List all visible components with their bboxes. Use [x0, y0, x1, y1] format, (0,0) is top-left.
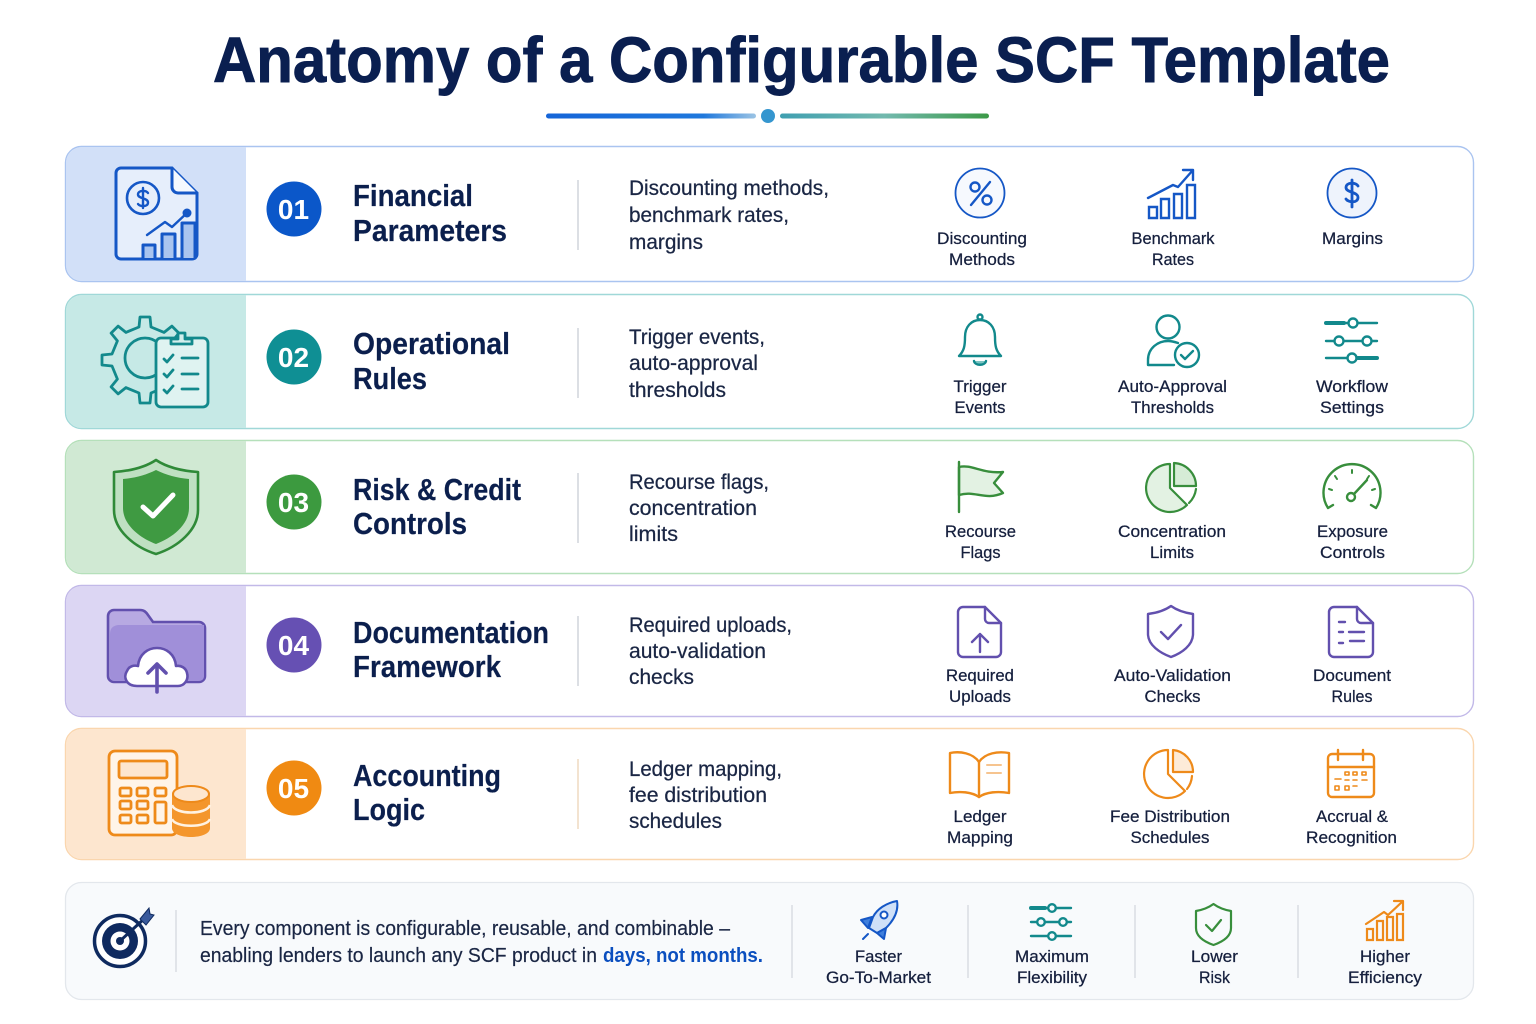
number badge 05	[266, 760, 322, 816]
item: concentration limits: Limits	[1150, 543, 1194, 562]
item: concentration limits	[1118, 463, 1226, 562]
item: auto-approval thresholds	[1118, 316, 1227, 417]
description	[629, 758, 782, 833]
panel: 05 accounting logic	[66, 728, 1474, 860]
description	[629, 177, 829, 254]
item: discounting methods: Methods	[949, 250, 1015, 269]
heading: financial parameters: Parameters	[353, 213, 507, 248]
description: Required uploads,	[629, 614, 792, 637]
item: accrual and recognition: Accrual &	[1316, 807, 1389, 826]
benefit: lower risk: Risk	[1199, 968, 1230, 987]
item: fee distribution schedules: Schedules	[1130, 828, 1210, 847]
item: accrual and recognition: Recognition	[1306, 828, 1397, 847]
item: discounting methods	[937, 168, 1027, 269]
heading: documentation framework: Documentation	[353, 615, 549, 650]
item: recourse flags: Flags	[960, 543, 1000, 562]
number badge 04: 04	[278, 630, 309, 661]
description: concentration	[629, 497, 757, 520]
number badge 01: 01	[278, 194, 309, 225]
description: checks	[629, 666, 694, 689]
heading: operational rules	[353, 326, 510, 396]
summary statement: enabling lenders to launch any SCF product in	[200, 944, 597, 967]
summary statement: days, not months.	[603, 944, 763, 967]
benefit: faster go-to-market	[826, 901, 931, 987]
benefit: higher efficiency: Higher	[1360, 947, 1410, 966]
heading: financial parameters: Financial	[353, 178, 473, 213]
description: benchmark rates,	[629, 204, 789, 227]
item: exposure controls	[1317, 464, 1388, 562]
item: document rules	[1313, 607, 1391, 706]
item: accrual and recognition	[1306, 750, 1397, 847]
heading: accounting logic	[353, 758, 501, 827]
description: limits	[629, 523, 678, 546]
benefit: maximum flexibility: Maximum	[1015, 947, 1089, 966]
description: schedules	[629, 810, 722, 833]
item: workflow settings: Workflow	[1316, 377, 1389, 396]
description: auto-approval	[629, 352, 758, 375]
title: Anatomy of a Configurable SCF Template	[213, 24, 1390, 96]
item: workflow settings: Settings	[1320, 398, 1384, 417]
item: workflow settings	[1316, 318, 1389, 417]
description: thresholds	[629, 379, 726, 402]
number badge 02	[266, 330, 322, 384]
benefit: faster go-to-market: Go-To-Market	[826, 968, 931, 987]
item: fee distribution schedules	[1110, 750, 1230, 847]
item: exposure controls: Controls	[1320, 543, 1385, 562]
benefit: maximum flexibility	[1015, 904, 1089, 987]
item: benchmark rates	[1132, 170, 1215, 269]
benefit: higher efficiency	[1348, 901, 1422, 987]
item: auto-approval thresholds: Auto-Approval	[1118, 377, 1227, 396]
item: auto-approval thresholds: Thresholds	[1131, 398, 1214, 417]
heading: risk and credit controls	[353, 472, 521, 541]
panel: 04 documentation framework	[66, 586, 1474, 716]
description	[629, 326, 765, 402]
heading: documentation framework: Framework	[353, 649, 502, 684]
icon: calculator and coins	[109, 751, 210, 837]
item: required uploads: Uploads	[949, 687, 1011, 706]
item: margins	[1322, 168, 1383, 248]
icon: folder with cloud upload	[108, 610, 205, 692]
benefit: lower risk: Lower	[1191, 947, 1238, 966]
item: ledger mapping: Mapping	[947, 828, 1013, 847]
description: auto-validation	[629, 640, 766, 663]
item: recourse flags	[945, 462, 1016, 562]
heading: risk and credit controls: Risk & Credit	[353, 472, 521, 507]
number badge 01	[266, 182, 322, 236]
benefit: maximum flexibility: Flexibility	[1017, 968, 1087, 987]
icon: shield with check	[114, 460, 198, 554]
item: concentration limits: Concentration	[1118, 522, 1226, 541]
item: recourse flags: Recourse	[945, 522, 1016, 541]
number badge 02: 02	[278, 342, 309, 373]
item: document rules: Rules	[1332, 687, 1372, 706]
heading: accounting logic: Accounting	[353, 758, 501, 793]
description	[629, 471, 769, 546]
item: trigger events: Trigger	[954, 377, 1007, 396]
title underline	[546, 109, 989, 123]
number badge 03	[266, 474, 322, 530]
item: ledger mapping	[947, 752, 1013, 847]
heading: operational rules: Operational	[353, 326, 510, 361]
panel: 01 financial parameters	[66, 146, 1474, 282]
item: benchmark rates: Benchmark	[1132, 229, 1215, 248]
summary statement: Every component is configurable, reusable, and combinable –	[200, 917, 731, 940]
number badge 05: 05	[278, 773, 309, 804]
item: auto-validation checks: Checks	[1144, 687, 1200, 706]
description: Ledger mapping,	[629, 758, 782, 781]
description: fee distribution	[629, 784, 767, 807]
item: fee distribution schedules: Fee Distribution	[1110, 807, 1230, 826]
item: exposure controls: Exposure	[1317, 522, 1388, 541]
benefit: lower risk	[1191, 904, 1238, 987]
item: auto-validation checks	[1114, 606, 1231, 706]
heading: documentation framework	[353, 615, 549, 684]
icon: target with arrow	[94, 908, 154, 966]
heading: operational rules: Rules	[353, 361, 427, 396]
icon: gear and checklist	[102, 317, 208, 407]
number badge 04	[266, 618, 322, 672]
number badge 03: 03	[278, 487, 309, 518]
item: margins: Margins	[1322, 229, 1383, 248]
description: margins	[629, 231, 703, 254]
panel: footer summary	[66, 882, 1474, 1000]
description: Recourse flags,	[629, 471, 769, 494]
benefit: higher efficiency: Efficiency	[1348, 968, 1422, 987]
item: required uploads	[946, 607, 1014, 706]
icon: financial document	[116, 168, 197, 259]
item: ledger mapping: Ledger	[954, 807, 1007, 826]
description: Discounting methods,	[629, 177, 829, 200]
panel: 03 risk and credit controls	[66, 440, 1474, 574]
item: trigger events	[954, 314, 1007, 417]
benefit: faster go-to-market: Faster	[855, 947, 902, 966]
description: Trigger events,	[629, 326, 765, 349]
item: auto-validation checks: Auto-Validation	[1114, 666, 1231, 685]
heading: financial parameters	[353, 178, 507, 248]
item: discounting methods: Discounting	[937, 229, 1027, 248]
item: document rules: Document	[1313, 666, 1391, 685]
summary statement	[200, 917, 763, 967]
item: benchmark rates: Rates	[1152, 250, 1194, 269]
heading: risk and credit controls: Controls	[353, 506, 467, 541]
item: required uploads: Required	[946, 666, 1014, 685]
description	[629, 614, 792, 689]
panel: 02 operational rules	[66, 294, 1474, 428]
heading: accounting logic: Logic	[353, 792, 425, 827]
item: trigger events: Events	[954, 398, 1006, 417]
